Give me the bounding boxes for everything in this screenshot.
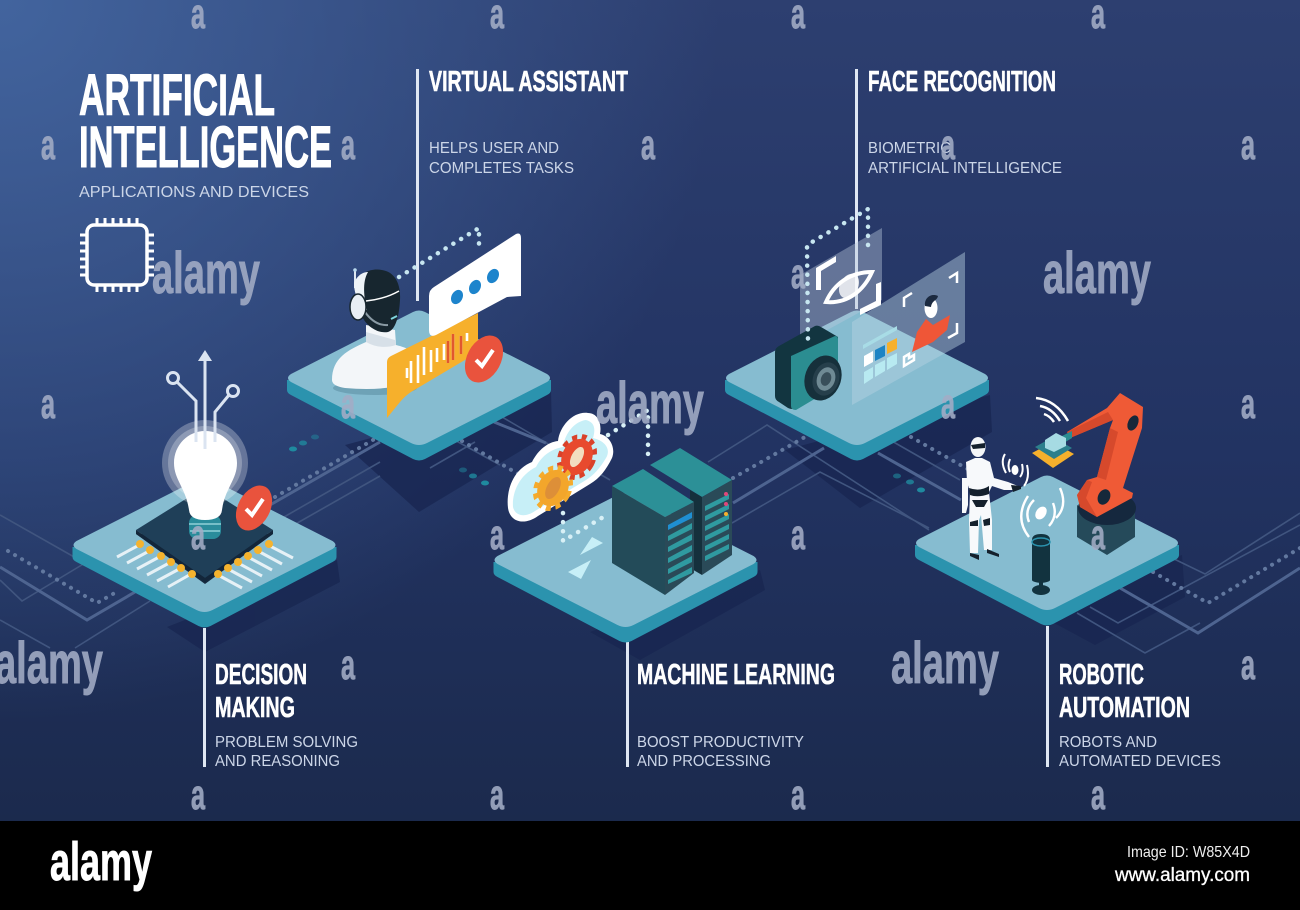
watermark pattern: a bbox=[791, 771, 805, 818]
dotted link bbox=[807, 209, 868, 342]
watermark pattern: a bbox=[1241, 121, 1255, 168]
watermark pattern: a bbox=[791, 250, 805, 297]
heading: machine learning: BOOST PRODUCTIVITY bbox=[637, 734, 804, 751]
icon: smart speaker bbox=[1021, 488, 1063, 595]
icon: chip outline bbox=[80, 218, 154, 292]
watermark pattern: a bbox=[41, 380, 55, 427]
heading: machine learning bbox=[637, 659, 835, 770]
icon: light bulb bbox=[162, 420, 248, 539]
icon: circuit arrows bbox=[168, 350, 238, 449]
watermark pattern: a bbox=[941, 121, 955, 168]
watermark pattern: a bbox=[641, 121, 655, 168]
title: INTELLIGENCE bbox=[79, 115, 332, 180]
footer bar bbox=[0, 821, 1300, 910]
heading: virtual assistant: COMPLETES TASKS bbox=[429, 160, 574, 177]
heading: face recognition: BIOMETRIC bbox=[868, 140, 951, 157]
icon: chip bbox=[117, 487, 293, 588]
watermark pattern: a bbox=[41, 121, 55, 168]
heading: robotic automation: ROBOTIC bbox=[1059, 659, 1144, 691]
watermark pattern: alamy bbox=[891, 631, 999, 696]
heading: face recognition bbox=[868, 66, 1062, 177]
heading: face recognition: FACE RECOGNITION bbox=[868, 66, 1056, 98]
watermark pattern: a bbox=[1091, 771, 1105, 818]
heading: machine learning: MACHINE LEARNING bbox=[637, 659, 835, 691]
watermark pattern: a bbox=[191, 771, 205, 818]
heading: robotic automation bbox=[1059, 659, 1221, 770]
heading: virtual assistant: HELPS USER AND bbox=[429, 140, 559, 157]
icon: wifi signal bbox=[1036, 398, 1068, 422]
watermark pattern: a bbox=[490, 771, 504, 818]
footer bar: alamy bbox=[50, 832, 152, 892]
callout line: robotic automation bbox=[1046, 626, 1049, 767]
watermark pattern: a bbox=[941, 380, 955, 427]
thick circuit lines bbox=[0, 422, 1300, 633]
icon: robot assistant bbox=[332, 268, 417, 395]
icon: red check badge bbox=[229, 479, 279, 537]
heading: robotic automation: AUTOMATED DEVICES bbox=[1059, 753, 1221, 770]
callout line: decision making bbox=[203, 628, 206, 767]
footer bar: Image ID: W85X4D bbox=[1127, 844, 1250, 861]
watermark pattern: a bbox=[1241, 380, 1255, 427]
panel: robotic automation bbox=[915, 393, 1179, 626]
watermark pattern: alamy bbox=[596, 371, 704, 436]
icon: robot arm bbox=[1032, 393, 1143, 555]
watermark pattern: alamy bbox=[1043, 241, 1151, 306]
watermark pattern: a bbox=[341, 121, 355, 168]
icon: humanoid robot bbox=[962, 437, 1021, 560]
watermark pattern: a bbox=[191, 511, 205, 558]
icon: face id panel bbox=[852, 252, 965, 405]
heading: decision making: AND REASONING bbox=[215, 753, 340, 770]
icon: red check badge bbox=[457, 329, 511, 389]
footer bar: www.alamy.com bbox=[1114, 865, 1250, 886]
heading: face recognition: ARTIFICIAL INTELLIGENCE bbox=[868, 160, 1062, 177]
heading: robotic automation: AUTOMATION bbox=[1059, 692, 1190, 724]
dotted links bbox=[563, 410, 648, 541]
panel: decision making bbox=[72, 350, 336, 628]
title: APPLICATIONS AND DEVICES bbox=[79, 184, 309, 201]
watermark pattern: a bbox=[1241, 641, 1255, 688]
heading: robotic automation: ROBOTS AND bbox=[1059, 734, 1157, 751]
icon: camera bbox=[775, 326, 848, 410]
teal dashes bbox=[289, 434, 925, 492]
icon: wave from hand bbox=[1003, 454, 1028, 486]
icon: chat bubble bbox=[429, 234, 521, 336]
heading: decision making: DECISION bbox=[215, 659, 307, 691]
dotted link bbox=[399, 228, 479, 277]
heading: decision making bbox=[215, 659, 358, 770]
heading: machine learning: AND PROCESSING bbox=[637, 753, 771, 770]
heading: virtual assistant: VIRTUAL ASSISTANT bbox=[429, 66, 628, 98]
circuit lines bbox=[0, 410, 1300, 653]
icon: eye scan panel bbox=[800, 228, 882, 345]
dotted circuit traces bbox=[8, 437, 1300, 603]
panel: face recognition bbox=[725, 209, 989, 460]
watermark pattern: a bbox=[490, 511, 504, 558]
icon: cloud with gears bbox=[508, 413, 613, 522]
icon: triangles bbox=[568, 537, 603, 579]
watermark pattern: alamy bbox=[152, 241, 260, 306]
panel: machine learning bbox=[494, 410, 758, 642]
title: ARTIFICIAL bbox=[79, 63, 275, 128]
callout line: machine learning bbox=[626, 642, 629, 767]
heading: decision making: MAKING bbox=[215, 692, 295, 724]
callout line: virtual assistant bbox=[416, 69, 419, 301]
heading: virtual assistant bbox=[429, 66, 628, 177]
title bbox=[79, 63, 332, 201]
watermark pattern: a bbox=[1091, 511, 1105, 558]
icon: server racks bbox=[612, 448, 732, 595]
watermark pattern: a bbox=[791, 511, 805, 558]
callout line: face recognition bbox=[855, 69, 858, 309]
heading: decision making: PROBLEM SOLVING bbox=[215, 734, 358, 751]
watermark pattern: a bbox=[341, 641, 355, 688]
watermark pattern: a bbox=[341, 380, 355, 427]
platform shadows bbox=[167, 390, 1185, 660]
icon: audio bubble bbox=[387, 313, 478, 418]
panel: virtual assistant bbox=[287, 228, 551, 460]
